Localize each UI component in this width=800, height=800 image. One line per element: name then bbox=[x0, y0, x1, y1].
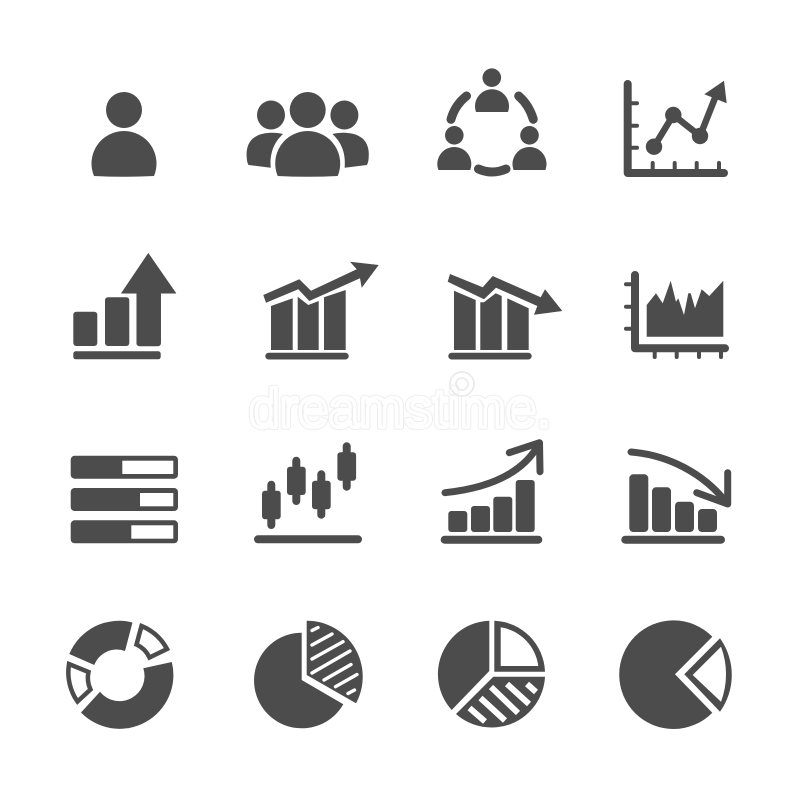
icon: bar chart with falling arrow bbox=[448, 274, 562, 360]
icon: person bbox=[92, 92, 156, 177]
icon: pie chart with outlined slice bbox=[619, 620, 732, 729]
icon: line chart with rising arrow bbox=[628, 81, 727, 173]
icon: team circle bbox=[437, 68, 547, 172]
icon: bars with up arrow bbox=[73, 253, 176, 359]
icon: progress bars bbox=[71, 456, 178, 543]
icon: bar chart with rising arrow bbox=[263, 262, 379, 360]
icon: pie chart with hatched slice bbox=[254, 621, 363, 728]
icon: area chart bbox=[626, 275, 725, 357]
icon: group of people bbox=[247, 92, 369, 177]
icon: rising bars with curved arrow bbox=[441, 443, 542, 544]
icon: candlestick chart bbox=[254, 442, 362, 543]
icon: pie chart with three slices bbox=[438, 621, 545, 728]
watermark: dreamstime. bbox=[249, 377, 552, 439]
watermark: dreamstime. bbox=[249, 377, 552, 439]
icon: falling bars with curved arrow bbox=[621, 452, 728, 544]
icon: donut chart bbox=[68, 621, 173, 729]
